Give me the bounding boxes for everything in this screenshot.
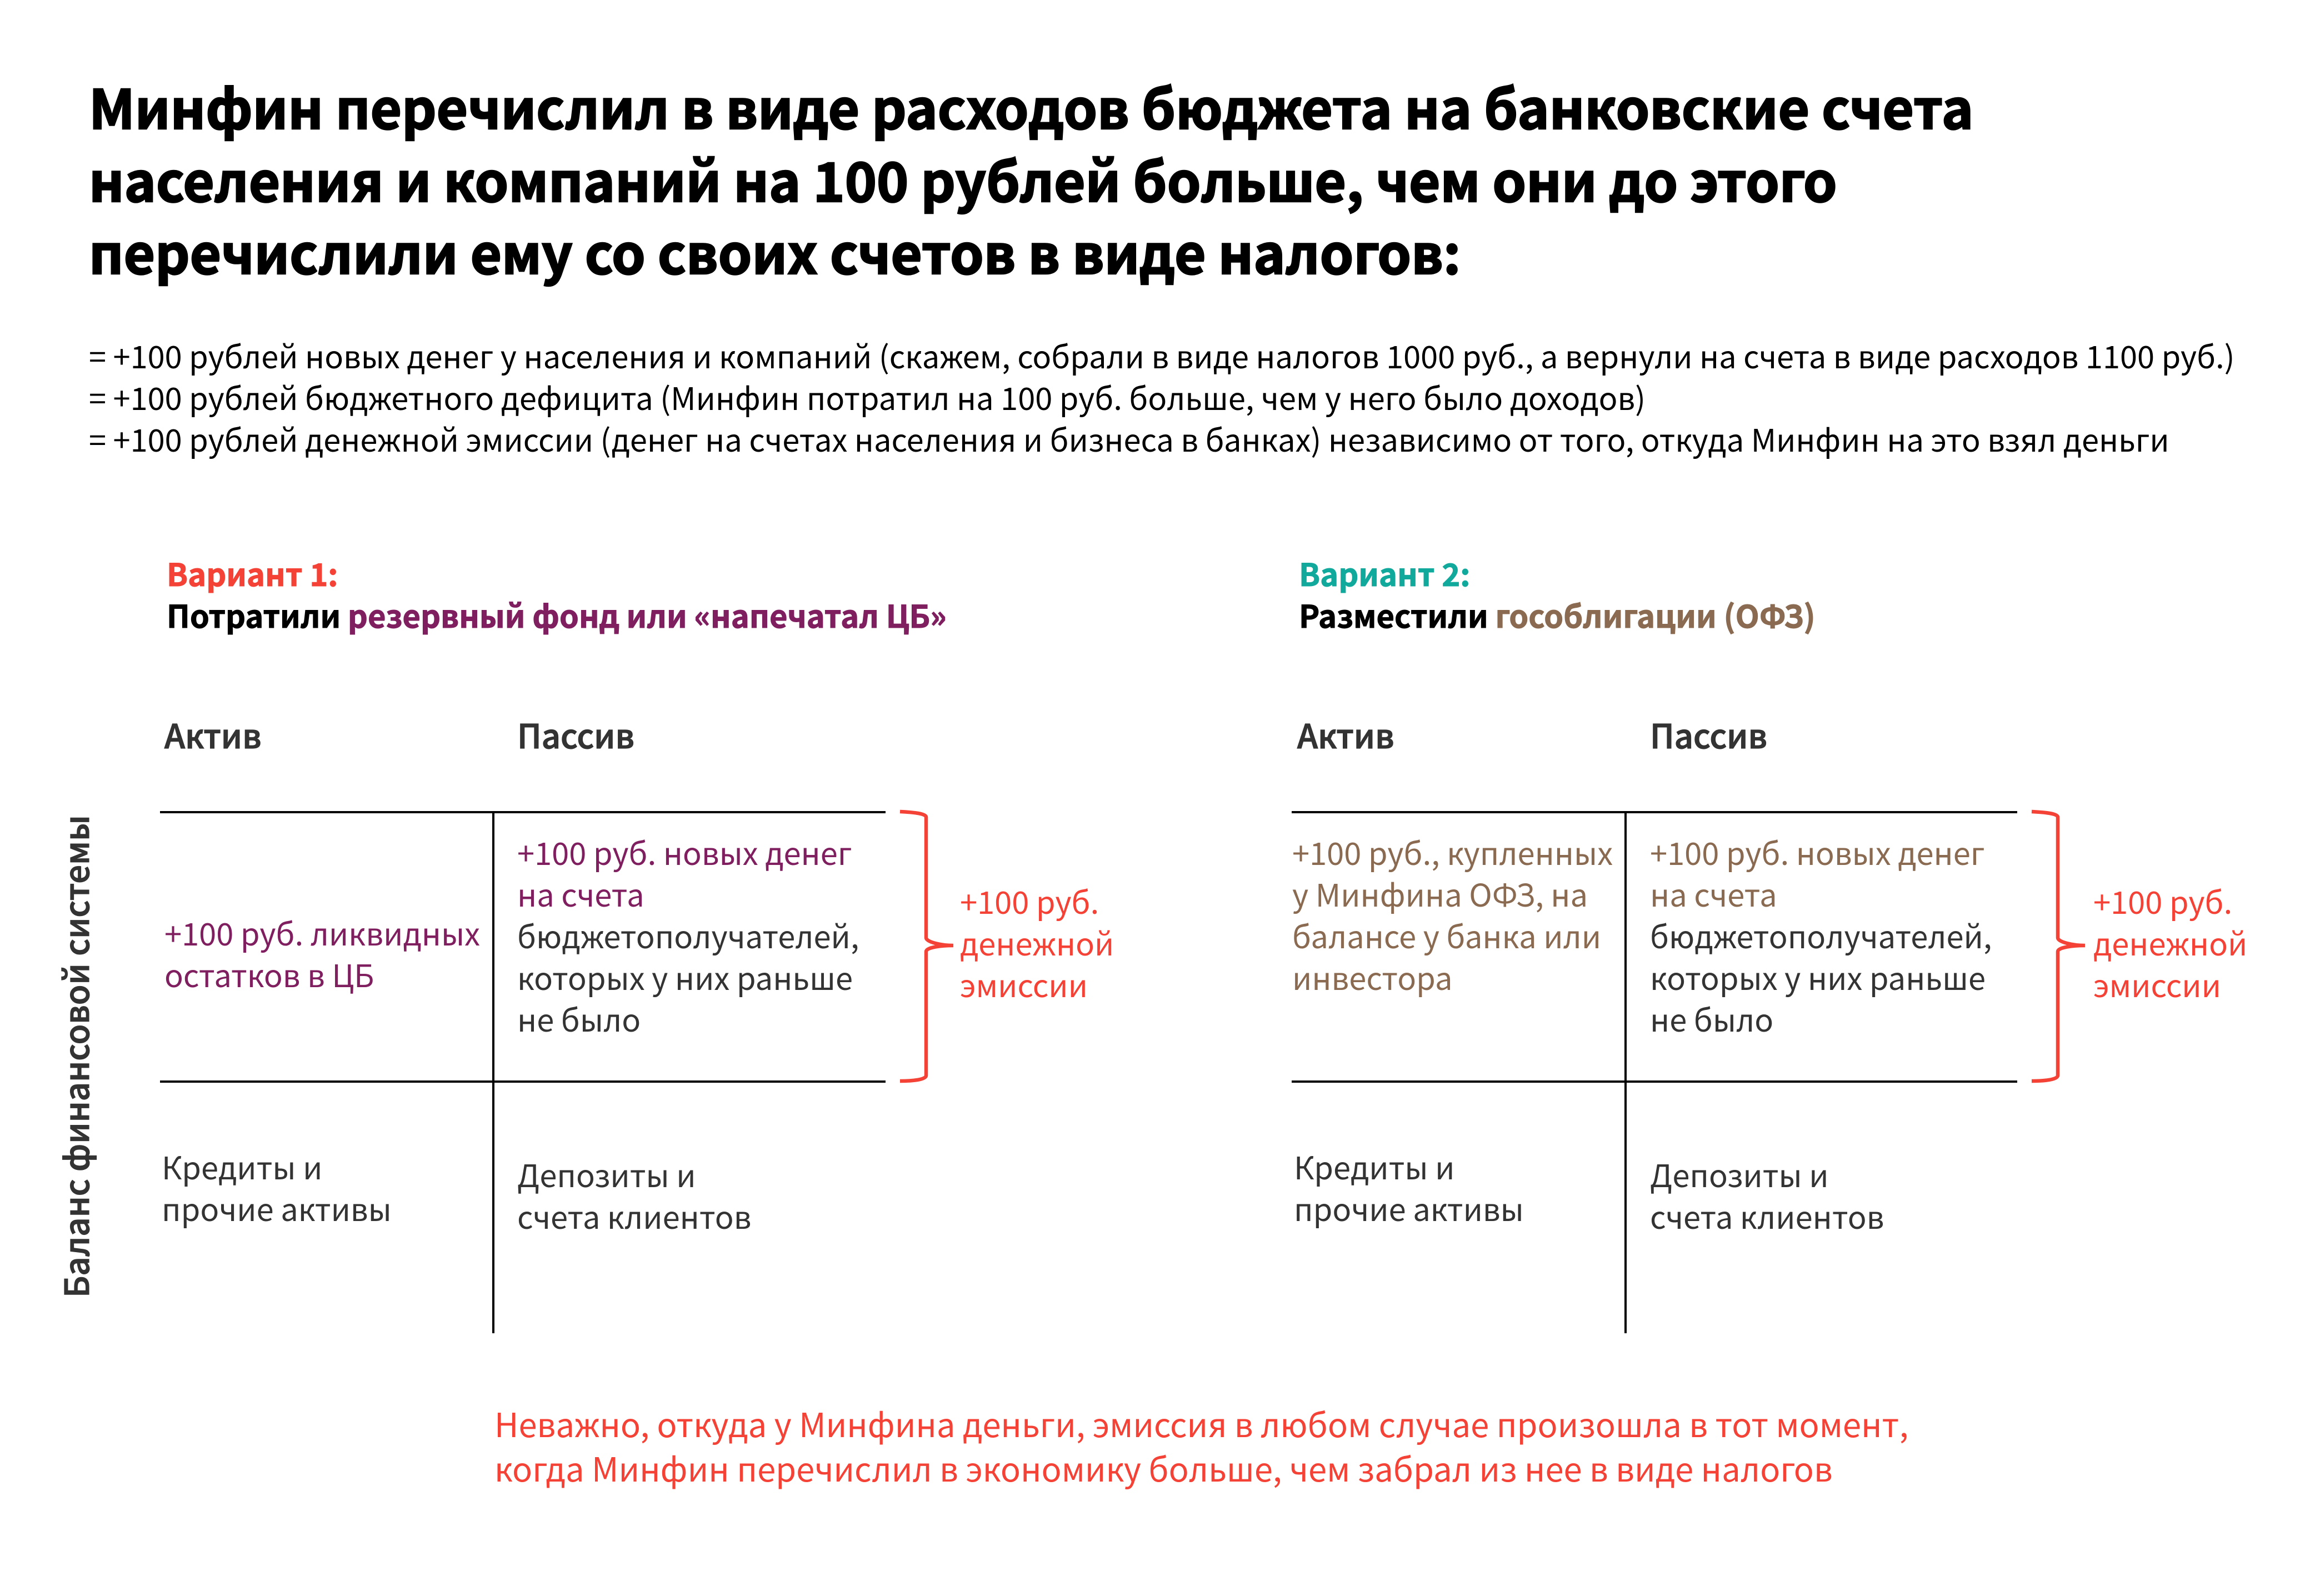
liability cell: deposits <box>517 1152 751 1238</box>
asset cell: liquid balances <box>164 910 480 997</box>
asset cell: loans <box>1294 1144 1524 1230</box>
liability cell: new money: не было <box>517 996 641 1041</box>
variant 2 heading: Вариант 2: <box>1299 551 1470 596</box>
liability cell: new money: бюджетополучателей, <box>517 913 859 958</box>
liability cell: new money: не было <box>1650 996 1773 1041</box>
summary text: = +100 рублей денежной эмиссии (денег на счетах населения и бизнеса в банках) независимо от того, откуда Минфин на это взял деньги <box>89 416 2169 461</box>
asset cell: loans: прочие активы <box>162 1185 392 1230</box>
liability cell: new money: +100 руб. новых денег <box>1650 829 1984 874</box>
column header: asset: Актив <box>1297 711 1394 758</box>
callout: emission: +100 руб. <box>2093 878 2232 923</box>
summary text: = +100 рублей новых денег у населения и компаний (скажем, собрали в виде налогов 1000 руб., а вернули на счета в виде расходов 1100 руб.) <box>89 333 2235 378</box>
variant 1 heading: Вариант 1: <box>167 551 338 596</box>
title: перечислили ему со своих счетов в виде налогов: <box>89 211 1461 289</box>
conclusion note <box>494 1399 1908 1492</box>
summary text <box>89 333 2235 461</box>
liability cell: deposits: Депозиты и <box>1650 1152 1829 1197</box>
callout: emission: эмиссии <box>2093 962 2221 1007</box>
liability cell: new money: бюджетополучателей, <box>1650 913 1992 958</box>
callout: emission <box>960 878 1114 1007</box>
title <box>89 66 1973 289</box>
liability cell: new money: на счета <box>517 871 644 916</box>
asset cell: bonds: у Минфина ОФЗ, на <box>1292 871 1588 916</box>
panel: variant 1 <box>160 551 1114 1333</box>
callout: emission <box>2093 878 2247 1007</box>
callout: emission: +100 руб. <box>960 878 1099 923</box>
liability cell: new money: на счета <box>1650 871 1777 916</box>
liability cell: new money <box>517 829 859 1041</box>
liability cell: deposits: Депозиты и <box>517 1152 696 1197</box>
brace <box>2032 812 2085 1081</box>
asset cell: liquid balances: +100 руб. ликвидных <box>164 910 480 955</box>
asset cell: bonds: балансе у банка или <box>1292 913 1601 958</box>
column header: asset: Актив <box>164 711 262 758</box>
liability cell: new money <box>1650 829 1992 1041</box>
asset cell: bonds: +100 руб., купленных <box>1292 829 1613 874</box>
callout: emission: денежной <box>2093 920 2247 965</box>
liability cell: deposits <box>1650 1152 1884 1238</box>
brace <box>900 812 953 1081</box>
vertical axis label: Баланс финансовой системы <box>51 815 99 1298</box>
liability cell: deposits: счета клиентов <box>1650 1193 1884 1238</box>
asset cell: loans: прочие активы <box>1294 1185 1524 1230</box>
summary text: = +100 рублей бюджетного дефицита (Минфин потратил на 100 руб. больше, чем у него было доходов) <box>89 374 1646 419</box>
asset cell: loans <box>162 1144 392 1230</box>
variant 2 heading <box>1299 551 1816 637</box>
table grid <box>1292 812 2017 1333</box>
column header: liability: Пассив <box>517 711 634 758</box>
liability cell: new money: +100 руб. новых денег <box>517 829 852 874</box>
asset cell: liquid balances: остатков в ЦБ <box>164 952 374 997</box>
conclusion note: когда Минфин перечислил в экономику больше, чем забрал из нее в виде налогов <box>494 1444 1833 1492</box>
variant 1 heading: Потратили резервный фонд или «напечатал ЦБ» <box>167 592 947 637</box>
liability cell: deposits: счета клиентов <box>517 1193 751 1238</box>
liability cell: new money: которых у них раньше <box>1650 954 1986 999</box>
variant 1 heading <box>167 551 947 637</box>
callout: emission: эмиссии <box>960 962 1088 1007</box>
title: населения и компаний на 100 рублей больше, чем они до этого <box>89 139 1837 217</box>
table grid <box>160 812 886 1333</box>
asset cell: bonds <box>1292 829 1613 999</box>
variant 2 heading: Разместили гособлигации (ОФЗ) <box>1299 592 1816 637</box>
column header: liability: Пассив <box>1650 711 1767 758</box>
callout: emission: денежной <box>960 920 1114 965</box>
panel: variant 2 <box>1292 551 2247 1333</box>
asset cell: bonds: инвестора <box>1292 954 1453 999</box>
liability cell: new money: которых у них раньше <box>517 954 853 999</box>
asset cell: loans: Кредиты и <box>162 1144 322 1189</box>
title: Минфин перечислил в виде расходов бюджета на банковские счета <box>89 66 1973 144</box>
asset cell: loans: Кредиты и <box>1294 1144 1454 1189</box>
conclusion note: Неважно, откуда у Минфина деньги, эмиссия в любом случае произошла в тот момент, <box>494 1399 1908 1447</box>
